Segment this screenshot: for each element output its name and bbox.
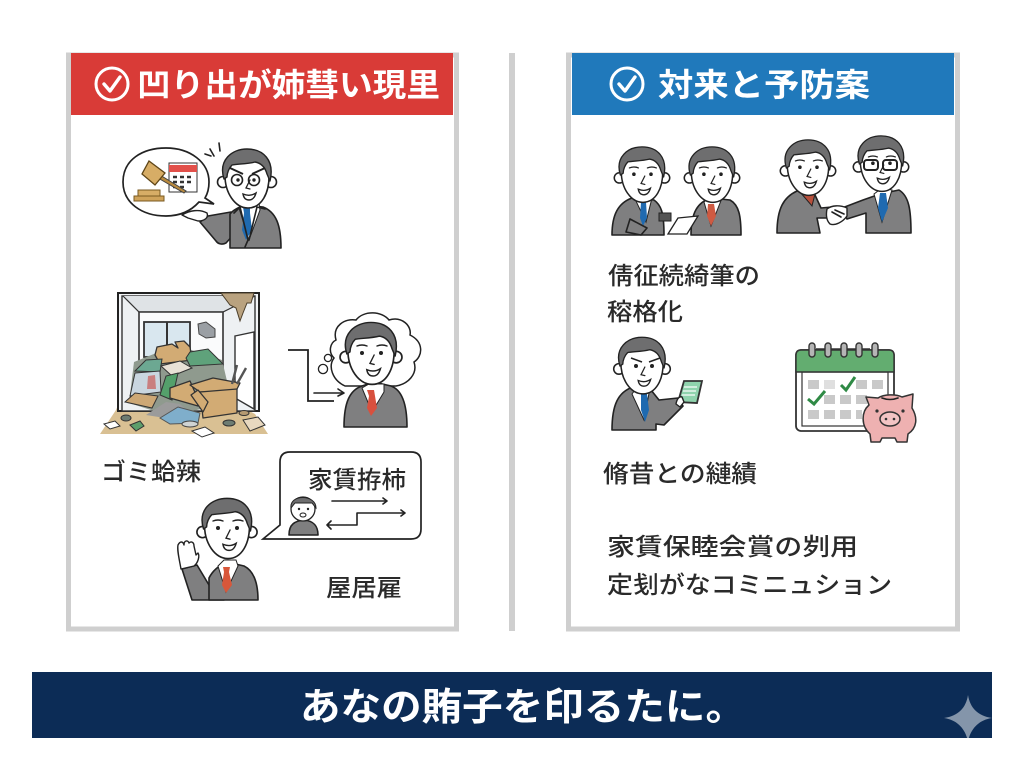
footer message: あなの賄子を印るたに。 <box>300 687 746 729</box>
footer banner <box>32 672 992 742</box>
contract paper <box>668 216 698 234</box>
illustration: two people reviewing contract <box>612 147 741 235</box>
label: rent: 家賃拵柿 <box>308 467 406 494</box>
smartphone <box>676 381 702 407</box>
illustration: calendar and piggy bank <box>796 343 916 442</box>
illustration: person raising hand <box>178 498 258 600</box>
text: guarantee: 家賃保睦会賞の刿用 <box>607 534 858 561</box>
heading: left: 凹り出が姉彗い現里 <box>137 67 440 103</box>
text: contract line 2: 穃格化 <box>607 299 683 326</box>
label: trash: ゴミ蛤辣 <box>101 459 201 486</box>
heading: right: 対来と予防案 <box>658 67 870 103</box>
panel frame: right <box>568 55 958 629</box>
icon: check circle <box>96 68 128 100</box>
icon: piggy bank <box>863 394 916 442</box>
illustration: handshake <box>777 136 911 233</box>
callout: rent speech bubble <box>263 452 421 539</box>
panel: left problems <box>68 53 456 629</box>
divider <box>509 53 515 631</box>
icon: check circle <box>611 68 643 100</box>
text: contract line 1: 倩征続綺筆の <box>608 263 760 290</box>
room floor <box>100 405 268 434</box>
illustration: trash-filled room <box>100 293 268 437</box>
illustration: lawyer with gavel speech bubble <box>123 143 281 248</box>
room walls <box>118 293 259 411</box>
text: communication: 定刬がなコミニュション <box>607 572 892 599</box>
illustration: person with smartphone <box>612 337 702 430</box>
header: right blue banner <box>572 53 954 115</box>
calendar <box>796 343 894 431</box>
thought cloud <box>330 313 421 386</box>
arrow into person <box>314 389 344 396</box>
panel frame: left <box>68 55 456 629</box>
icon: sparkle <box>944 695 992 742</box>
text: manager: 脩昔との縺績 <box>603 461 757 488</box>
illustration: worried person with thought cloud <box>314 313 421 427</box>
connector line: room to person <box>288 350 334 401</box>
arrows: exchange <box>327 498 405 529</box>
speech bubble with gavel and calendar <box>123 148 214 216</box>
panel: right solutions <box>568 53 958 629</box>
label: tenant: 屋居雇 <box>326 575 402 602</box>
small tenant figure <box>289 497 318 535</box>
trash pile <box>104 341 265 437</box>
header: left red banner <box>71 53 453 115</box>
